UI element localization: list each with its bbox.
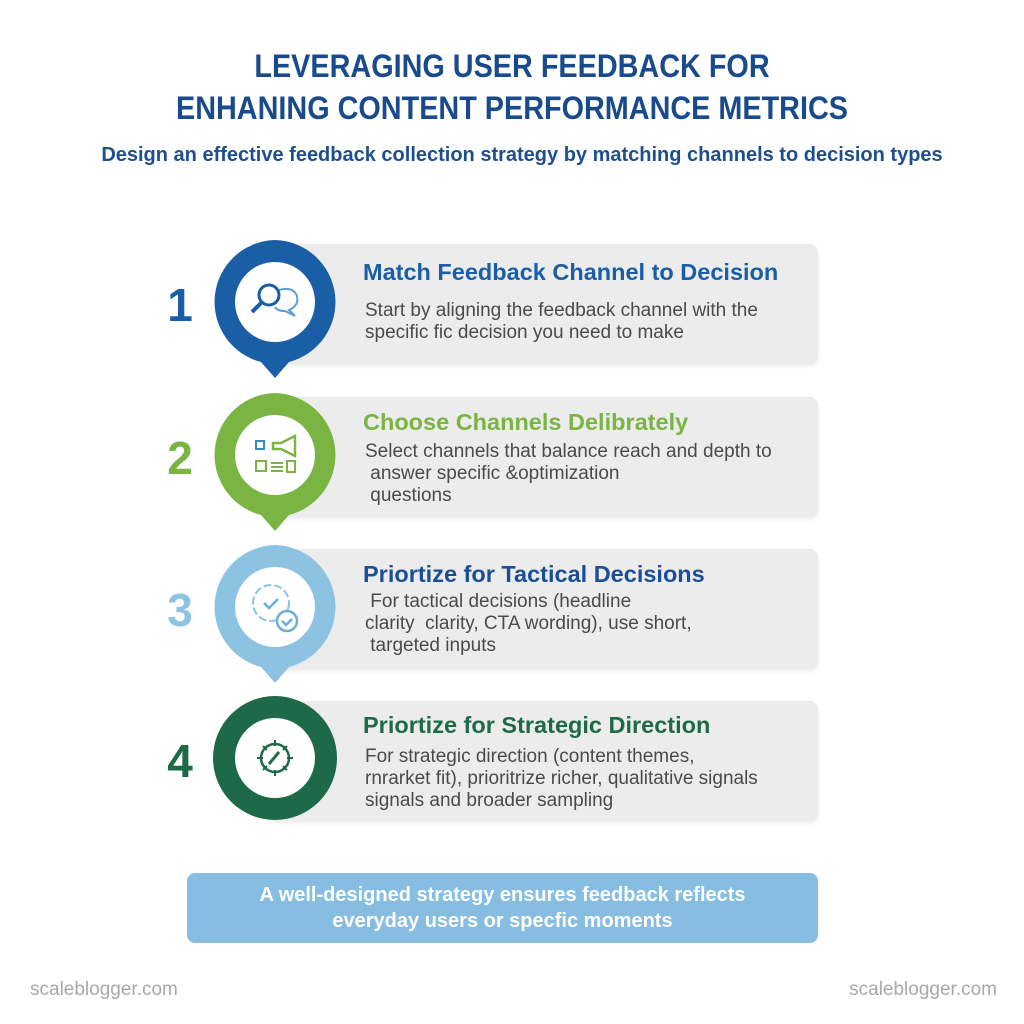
title: ENHANING CONTENT PERFORMANCE METRICS <box>176 90 848 126</box>
step 3 title: Priortize for Tactical Decisions <box>363 561 705 587</box>
footer left: scaleblogger.com <box>30 979 178 1000</box>
pin 3 <box>214 545 336 683</box>
step 2 body: questions <box>370 485 452 506</box>
card 3 <box>268 549 818 669</box>
step 3 body: clarity clarity, CTA wording), use short, <box>365 613 692 634</box>
step 4 body: For strategic direction (content themes, <box>365 746 694 767</box>
step 1 body: specific fic decision you need to make <box>365 322 684 343</box>
step 1 title: Match Feedback Channel to Decision <box>363 259 778 285</box>
number 2: 2 <box>167 432 193 484</box>
pin 2 <box>214 393 336 531</box>
conclusion banner <box>187 873 818 943</box>
card 1 <box>268 244 818 364</box>
step 4 title: Priortize for Strategic Direction <box>363 712 710 738</box>
pin 4 <box>213 696 337 820</box>
step 4 body: signals and broader sampling <box>365 790 613 811</box>
step 2 body: Select channels that balance reach and depth to <box>365 441 772 462</box>
subtitle: Design an effective feedback collection strategy by matching channels to decision types <box>101 144 943 166</box>
step 2 title: Choose Channels Delibrately <box>363 409 688 435</box>
card 2 <box>268 397 818 517</box>
step 4 body: rnrarket fit), prioritrize richer, qualitative signals <box>365 768 758 789</box>
step 2 body: answer specific &optimization <box>370 463 620 484</box>
step 3 body <box>365 591 692 656</box>
title <box>176 48 848 126</box>
step 4 body <box>365 746 758 811</box>
conclusion banner: everyday users or specfic moments <box>332 910 673 932</box>
step 2 body <box>365 441 772 506</box>
number 3: 3 <box>167 584 193 636</box>
card 4 <box>268 701 818 821</box>
number 1: 1 <box>167 279 193 331</box>
footer right: scaleblogger.com <box>849 979 997 1000</box>
title: LEVERAGING USER FEEDBACK FOR <box>254 48 770 84</box>
step 3 body: For tactical decisions (headline <box>370 591 631 612</box>
step 1 body <box>365 300 758 343</box>
number 4: 4 <box>167 735 193 787</box>
step 1 body: Start by aligning the feedback channel with the <box>365 300 758 321</box>
conclusion banner: A well-designed strategy ensures feedback reflects <box>259 884 746 906</box>
pin 1 <box>214 240 336 378</box>
step 3 body: targeted inputs <box>370 635 496 656</box>
